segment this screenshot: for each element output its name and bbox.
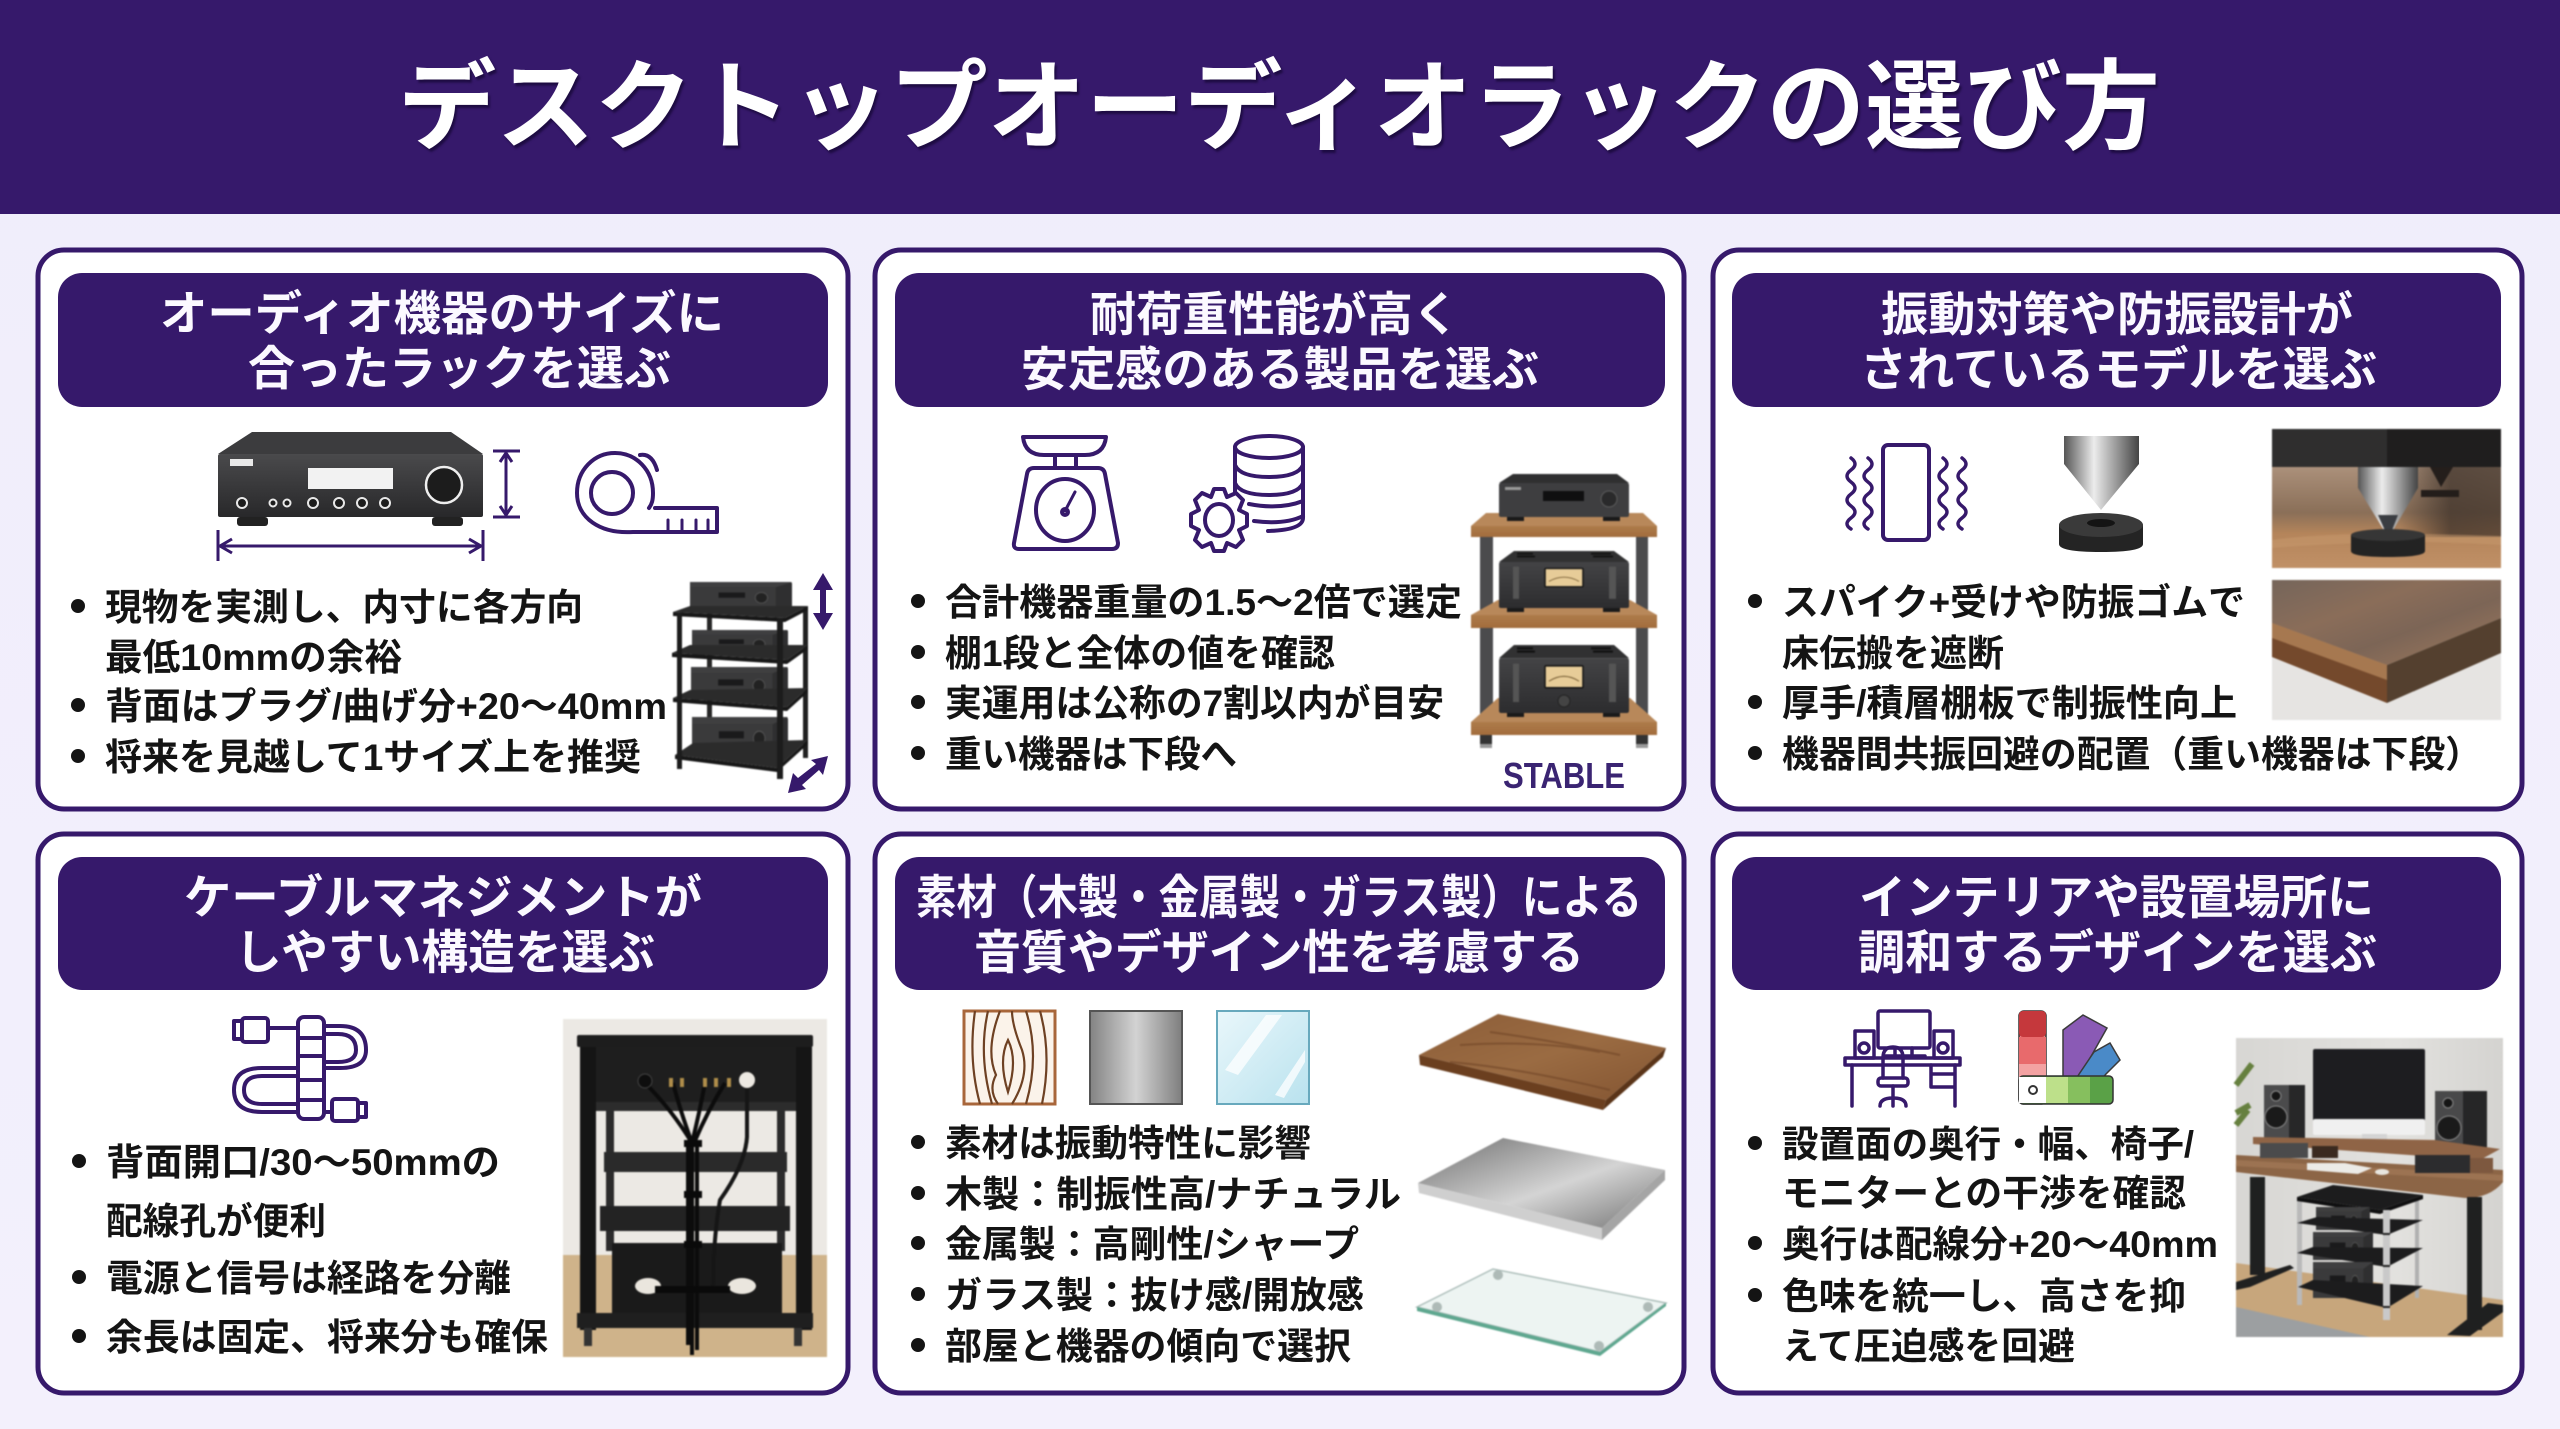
panel heading: cable management: ケーブルマネジメントが <box>184 871 702 924</box>
icon: scale <box>1014 437 1118 549</box>
title banner <box>0 0 2560 214</box>
arrow: rack depth <box>788 756 828 793</box>
photo: spike under rack <box>2272 429 2501 568</box>
bullet list: materials: 木製：制振性高/ナチュラル <box>945 1174 1401 1215</box>
icon: desk setup <box>1845 1011 1960 1106</box>
icon: amplifier with dimensions <box>218 432 520 561</box>
panel: load capacity <box>875 250 1684 809</box>
bullet list: load capacity <box>911 582 1462 775</box>
panel: materials <box>875 834 1684 1393</box>
bullet list: load capacity: 棚1段と全体の値を確認 <box>945 633 1335 674</box>
swatch: wood <box>964 1011 1055 1104</box>
bullet list: size <box>71 587 667 778</box>
title: デスクトップオーディオラックの選び方 <box>398 52 2160 162</box>
panel heading: materials <box>895 857 1665 990</box>
panel heading: interior: インテリアや設置場所に <box>1859 871 2374 924</box>
icon: coins and gear <box>1191 436 1303 551</box>
bullet list: size: 将来を見越して1サイズ上を推奨 <box>105 737 641 778</box>
bullet list: cable management: 電源と信号は経路を分離 <box>106 1258 511 1299</box>
photo: laminated wood shelf <box>2272 580 2501 720</box>
photo: desk with rack <box>2236 1038 2503 1337</box>
bullet list: vibration: 機器間共振回避の配置（重い機器は下段） <box>1782 734 2482 775</box>
bullet list: vibration <box>1748 581 2482 775</box>
arrow: rack height <box>813 573 833 630</box>
panel heading: size: 合ったラックを選ぶ <box>248 342 671 395</box>
photo: rack with routed cables <box>563 1019 827 1357</box>
bullet list: load capacity: 重い機器は下段へ <box>945 734 1237 775</box>
panel: vibration <box>1713 250 2522 809</box>
bullet list: vibration: 床伝搬を遮断 <box>1782 633 2004 674</box>
panel heading: load capacity <box>895 273 1665 407</box>
panel heading: cable management: しやすい構造を選ぶ <box>235 926 655 979</box>
bullet list: cable management <box>72 1142 548 1358</box>
bullet list: interior: 設置面の奥行・幅、椅子/ <box>1782 1124 2194 1165</box>
bullet list: cable management: 余長は固定、将来分も確保 <box>106 1317 548 1358</box>
icon: tape measure <box>577 453 717 532</box>
bullet list: vibration: スパイク+受けや防振ゴムで <box>1782 581 2245 623</box>
bullet list: interior <box>1748 1124 2218 1367</box>
panel heading: load capacity: 耐荷重性能が高く <box>1090 288 1459 341</box>
panel heading: vibration: 振動対策や防振設計が <box>1881 288 2353 341</box>
bullet list: load capacity: 合計機器重量の1.5〜2倍で選定 <box>945 582 1462 623</box>
panel heading: size <box>58 273 828 407</box>
panel heading: materials: 素材（木製・金属製・ガラス製）による <box>916 871 1642 924</box>
panel heading: vibration <box>1732 273 2501 407</box>
swatch: metal <box>1090 1011 1182 1104</box>
panel heading: interior <box>1732 857 2501 990</box>
bullet list: materials: 素材は振動特性に影響 <box>945 1123 1311 1164</box>
bullet list: materials <box>911 1123 1401 1367</box>
bullet list: size: 最低10mmの余裕 <box>105 637 402 678</box>
bullet list: materials: ガラス製：抜け感/開放感 <box>945 1275 1364 1316</box>
bullet list: vibration: 厚手/積層棚板で制振性向上 <box>1782 683 2237 724</box>
bullet list: size: 背面はプラグ/曲げ分+20〜40mm <box>105 686 667 727</box>
board: wood <box>1419 1014 1666 1110</box>
panel heading: interior: 調和するデザインを選ぶ <box>1858 926 2377 979</box>
bullet list: size: 現物を実測し、内寸に各方向 <box>105 587 583 628</box>
board: glass <box>1417 1269 1666 1356</box>
label: stable: STABLE <box>1503 755 1625 796</box>
bullet list: materials: 部屋と機器の傾向で選択 <box>945 1326 1351 1367</box>
bullet list: cable management: 背面開口/30〜50mmの <box>106 1142 500 1183</box>
panel heading: load capacity: 安定感のある製品を選ぶ <box>1021 343 1539 396</box>
panel heading: materials: 音質やデザイン性を考慮する <box>974 926 1584 979</box>
stable rack illustration <box>1471 474 1657 748</box>
icon: spike and receiver <box>2059 436 2143 552</box>
bullet list: cable management: 配線孔が便利 <box>106 1201 326 1242</box>
bullet list: interior: 奥行は配線分+20〜40mm <box>1782 1224 2218 1265</box>
bullet list: interior: モニターとの干渉を確認 <box>1782 1173 2186 1214</box>
bullet list: interior: えて圧迫感を回避 <box>1782 1326 2075 1367</box>
panel heading: vibration: されているモデルを選ぶ <box>1860 343 2377 396</box>
bullet list: load capacity: 実運用は公称の7割以内が目安 <box>945 683 1444 724</box>
panel heading: cable management <box>58 857 828 990</box>
bullet list: interior: 色味を統一し、高さを抑 <box>1782 1276 2186 1317</box>
panel heading: size: オーディオ機器のサイズに <box>160 287 724 340</box>
icon: cable ties <box>234 1017 366 1121</box>
panel: interior <box>1713 834 2522 1393</box>
panel: size <box>38 250 848 809</box>
icon: colour palette <box>2019 1011 2120 1104</box>
board: metal <box>1418 1138 1665 1240</box>
bullet list: materials: 金属製：高剛性/シャープ <box>945 1224 1359 1265</box>
icon: vibrating panel <box>1847 445 1966 540</box>
size rack illustration <box>672 582 808 779</box>
panel: cable management <box>38 834 848 1393</box>
swatch: glass <box>1217 1011 1309 1104</box>
